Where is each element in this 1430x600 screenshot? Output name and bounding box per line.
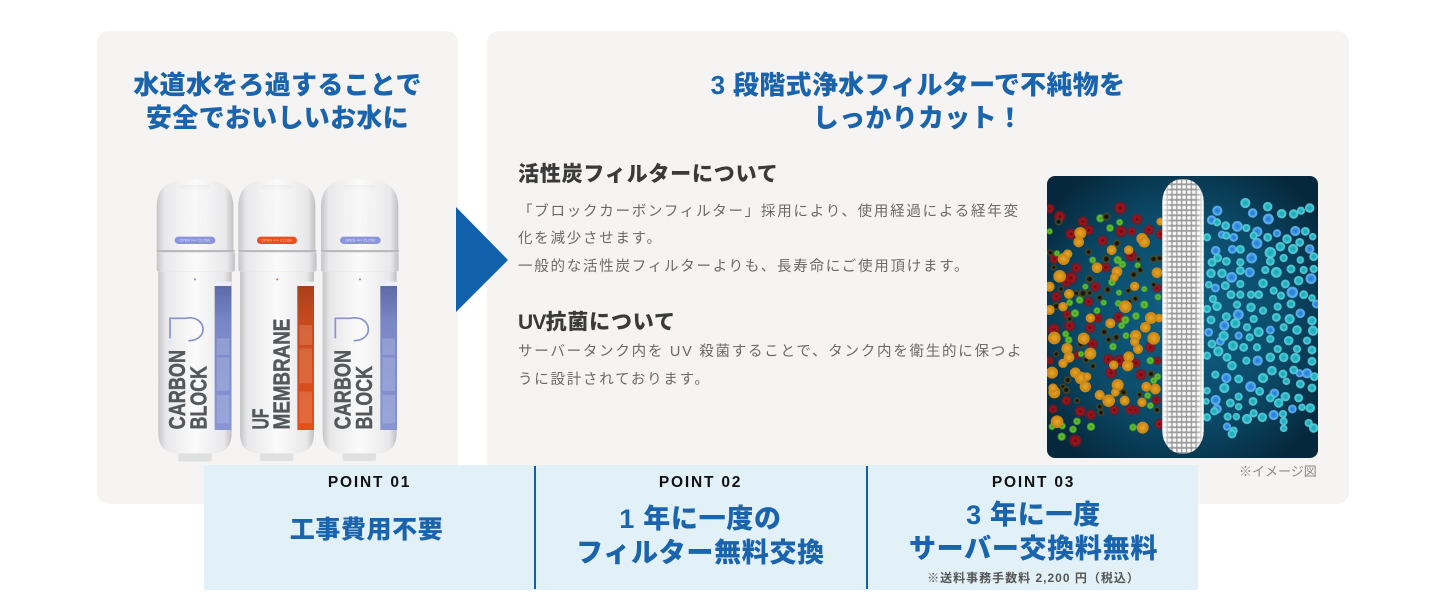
text block: UV description: うに設計されております。	[518, 372, 711, 388]
panel: left background	[97, 31, 458, 504]
cartridge: carbon block right: CARBON	[330, 350, 356, 429]
text block: activated carbon description: 「ブロックカーボンフィルター」採用により、使用経過による経年変	[518, 204, 1020, 220]
cartridge: UF membrane centre: OPEN ««« CLOSE	[262, 239, 293, 243]
title: free server replacement: サーバー交換料無料	[909, 534, 1158, 564]
cartridge: carbon block left: CARBON	[164, 350, 190, 429]
panel: right background	[487, 31, 1349, 504]
title: free filter replacement: フィルター無料交換	[576, 538, 825, 568]
title: free filter replacement: 1 年に一度の	[619, 504, 782, 534]
text block: UV description	[518, 343, 1023, 388]
cartridge: carbon block left: OPEN ««« CLOSE	[180, 239, 211, 243]
label: point 03: POINT 03	[992, 474, 1075, 491]
text block: activated carbon description	[518, 203, 1020, 274]
title: free server replacement	[909, 500, 1158, 564]
cartridge: UF membrane centre: UF	[247, 409, 273, 429]
particles: impurities on the left	[1045, 202, 1165, 446]
caption: image note: ※イメージ図	[1239, 464, 1317, 479]
text block: activated carbon description: 化を減少させます。	[518, 231, 663, 247]
heading: three-stage filter	[711, 70, 1125, 133]
note: shipping fee: ※送料事務手数料 2,200 円（税込）	[927, 571, 1140, 585]
label: point 01: POINT 01	[328, 474, 411, 491]
title: free server replacement: 3 年に一度	[966, 500, 1101, 530]
subheading: activated carbon filter: 活性炭フィルターについて	[518, 163, 779, 186]
cartridge: carbon block left: BLOCK	[186, 366, 212, 429]
label: point 02: POINT 02	[659, 474, 742, 491]
panel: points bar	[204, 465, 1198, 590]
text block: activated carbon description: 一般的な活性炭フィルターよりも、長寿命にご使用頂けます。	[518, 258, 970, 274]
title: free filter replacement	[576, 504, 825, 568]
icon: filter cartridges	[156, 180, 399, 462]
subheading: UV sterilization: UV抗菌について	[518, 311, 676, 334]
cartridge: carbon block right: BLOCK	[351, 366, 377, 429]
background: dark blue field	[1047, 176, 1318, 458]
heading: tap water filtration	[133, 70, 422, 133]
particles: clean water on the right	[1204, 199, 1320, 438]
text block: UV description: サーバータンク内を UV 殺菌することで、タンク内を衛生的に保つよ	[518, 344, 1023, 360]
divider: between point 2 and 3	[866, 466, 868, 589]
illustration: filter with particles	[1047, 176, 1318, 458]
icon: filter mesh column	[1162, 179, 1204, 454]
heading: three-stage filter: 3 段階式浄水フィルターで不純物を	[711, 70, 1125, 100]
cartridge: carbon block right	[321, 180, 399, 461]
title: no installation cost: 工事費用不要	[290, 516, 443, 544]
divider: between point 1 and 2	[534, 466, 536, 589]
cartridge: carbon block right: OPEN ««« CLOSE	[345, 239, 376, 243]
heading: three-stage filter: しっかりカット！	[813, 103, 1023, 133]
cartridge: UF membrane centre	[238, 180, 317, 461]
heading: tap water filtration: 安全でおいしいお水に	[146, 103, 409, 133]
heading: tap water filtration: 水道水をろ過することで	[133, 70, 422, 100]
cartridge: UF membrane centre: MEMBRANE	[268, 319, 294, 429]
arrow: pointing right	[456, 207, 508, 312]
cartridge: carbon block left	[157, 180, 235, 462]
